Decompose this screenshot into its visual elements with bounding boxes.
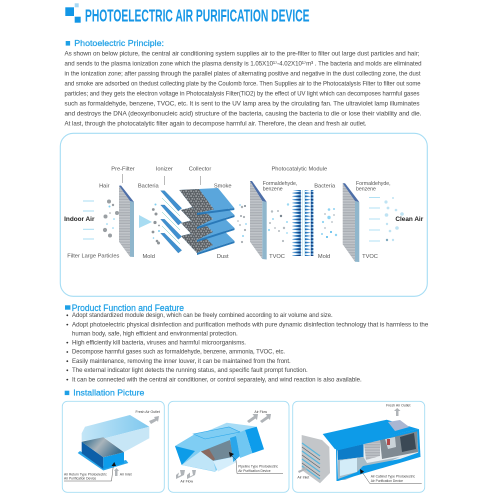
- icon: TVOC particles: [268, 203, 289, 242]
- label: formaldehyde, benzene: Formaldehyde,: [356, 181, 391, 187]
- icon: title squares: [65, 3, 81, 23]
- heading: photoelectric principle: Photoelectric Principle:: [74, 38, 164, 48]
- leader lines for stage labels: [123, 174, 201, 185]
- icon: final photocatalytic filter: [343, 183, 359, 262]
- callout: pipeline type device: Pipeline Type Photoelectric: [238, 465, 278, 469]
- label: stage names: Pre-Filter: [111, 167, 135, 173]
- callout: air cabinet type device: Air Purification Device: [371, 479, 403, 483]
- text block: principle description: [64, 51, 422, 128]
- label: air inlet: Air Inlet: [120, 473, 132, 477]
- icon: killed bacteria particles: [321, 208, 337, 238]
- panel: air return type installation: [62, 401, 164, 492]
- text block: principle description: and smoke are adsorbed on thedust collecting plate by the Coulomb force. Then Supplies air to the Photocatalysis Filter to filter out some: [64, 81, 421, 88]
- panel: purification process diagram: [60, 133, 427, 296]
- list: product features: The external indicator light detects the running status, and specific fault prompt function.: [72, 367, 308, 374]
- text block: principle description: such as formaldehyde, benzene, TVOC, etc. It is sent to the UV lamp area by the circulating fan. The ultraviolet lamp illuminates: [64, 101, 420, 108]
- label: stage names: TVOC: [269, 254, 285, 260]
- label: formaldehyde, benzene: benzene: [263, 186, 283, 192]
- label: stage names: Mold: [143, 254, 155, 260]
- icon: indoor air streams and particles: [83, 200, 124, 239]
- icon: clean air streams: [369, 197, 404, 241]
- callout: pipeline type device: Air Purification Device: [238, 469, 271, 473]
- label: stage names: Mold: [318, 254, 330, 260]
- label: air inlet: Air Inlet: [297, 476, 309, 480]
- icon: airflow arrow: [139, 215, 152, 228]
- label: air flow, upper: Air Flow: [254, 410, 267, 414]
- icon: air flow arrows, upper: [247, 414, 271, 423]
- illustration: air cabinet unit: [302, 420, 420, 483]
- panel: air cabinet type installation: [293, 401, 425, 492]
- heading: product function and feature: Product Function and Feature: [72, 303, 184, 313]
- icon: inlet arrow: [298, 468, 307, 473]
- label: stage names: Smoke: [214, 184, 232, 190]
- label: fresh air outlet: Fresh Air Outlet: [136, 410, 160, 414]
- callout: air cabinet type device: [360, 469, 422, 484]
- callout: air return type device: Air Purification Device: [64, 477, 96, 481]
- label: formaldehyde, benzene: [263, 181, 391, 192]
- title: PHOTOELECTRIC AIR PURIFICATION DEVICE: [85, 6, 310, 26]
- label: clean air: Clean Air: [395, 216, 424, 223]
- text block: principle description: particles; and they gets the electron voltage in Photocatalysis Filter(TiO2) by the effect of UV light which can decomposes harmful gases: [64, 91, 420, 98]
- icon: air flow arrows, lower: [176, 470, 196, 479]
- label: indoor air: Indoor Air: [64, 216, 95, 223]
- icon: inlet arrow: [114, 468, 119, 476]
- callout: pipeline type device: [229, 452, 283, 474]
- label: formaldehyde, benzene: benzene: [356, 186, 376, 192]
- icon: collector stack: [179, 188, 234, 255]
- text block: principle description: in the ionization zone; after passing through the parallel plates of alternating positive and negative in the dust collecting zone, the dust: [64, 71, 421, 78]
- heading: installation picture: Installation Picture: [73, 388, 145, 398]
- label: stage names: Photocatalytic Module: [271, 167, 327, 173]
- callout: air return type device: Air Return Type Photoelectric: [64, 473, 107, 477]
- text block: principle description: and sends to the plasma ionization zone which the plasma density is 1.05X10¹⁷-4.02X10¹⁷m³ . The bacteria and molds are eliminated: [64, 61, 422, 68]
- icon: smoke and dust particles: [237, 204, 247, 243]
- icon: pre-filter panel: [119, 186, 134, 257]
- label: stage names: Hair: [99, 184, 110, 190]
- icon: bacteria and mold particles: [152, 204, 160, 244]
- icon: UV lamp: [292, 190, 313, 256]
- label: formaldehyde, benzene: Formaldehyde,: [263, 181, 297, 187]
- label: air flow, lower: Air Flow: [180, 480, 193, 484]
- text block: principle description: At last, through the photocatalytic filter again to decompose harmful air. Therefore, the clean and fresh air outlet.: [64, 121, 367, 128]
- label: stage names: Filter Large Particles: [67, 253, 120, 259]
- panel: pipeline type installation: [168, 401, 289, 492]
- label: stage names: Bacteria: [314, 184, 336, 190]
- label: stage names: Dust: [217, 254, 229, 260]
- label: stage names: Collector: [189, 167, 211, 173]
- list: product features: It can be connected with the central air conditioner, or control separately, and wind reaction is also available.: [72, 376, 362, 383]
- label: stage names: Ionizer: [156, 167, 173, 173]
- illustration: pipeline duct and device: [175, 423, 264, 472]
- list: product features: Adopt photoelectric physical disinfection and purification methods with pure dynamic disinfection technology that is harmless to the: [72, 321, 429, 328]
- callout: air return type device: [64, 462, 116, 481]
- icon: ionizer plates: [161, 191, 182, 253]
- label: stage names: [67, 167, 378, 260]
- label: stage names: Bacteria: [138, 184, 160, 190]
- illustration: air return duct and device: [78, 415, 149, 470]
- label: stage names: TVOC: [362, 254, 378, 260]
- label: fresh air outlet: Fresh Air Outlet: [386, 404, 410, 408]
- icon: outlet arrow: [394, 408, 400, 416]
- list: product features: [66, 312, 429, 383]
- icon: outlet arrow: [149, 416, 159, 424]
- callout: air cabinet type device: Air Cabinet Type Photoelectric: [371, 475, 415, 479]
- text block: principle description: As shown on below picture, the central air conditioning system supplies air to the pre-filter to filter out large dust particles and hair;: [64, 51, 420, 58]
- list: product features: Decompose harmful gases such as formaldehyde, benzene, ammonia, TVOC, etc.: [72, 349, 285, 356]
- list: product features: Adopt standardized module design, which can be freely combined according to air volume and size.: [72, 312, 333, 319]
- list: product features: human body, safe, high efficient and environmental protection.: [72, 330, 238, 337]
- text block: principle description: and destroys the DNA (deoxyribonucleic acid) structure of the bacteria, causing the bacteria to die or lose their viability and die.: [64, 111, 422, 118]
- icon: first photocatalysis filter: [250, 181, 267, 260]
- list: product features: High efficiently kill bacteria, viruses and harmful microorganisms.: [72, 339, 246, 346]
- list: product features: Easily maintenance, removing the inner louver, it can be maintained from the front.: [72, 358, 291, 365]
